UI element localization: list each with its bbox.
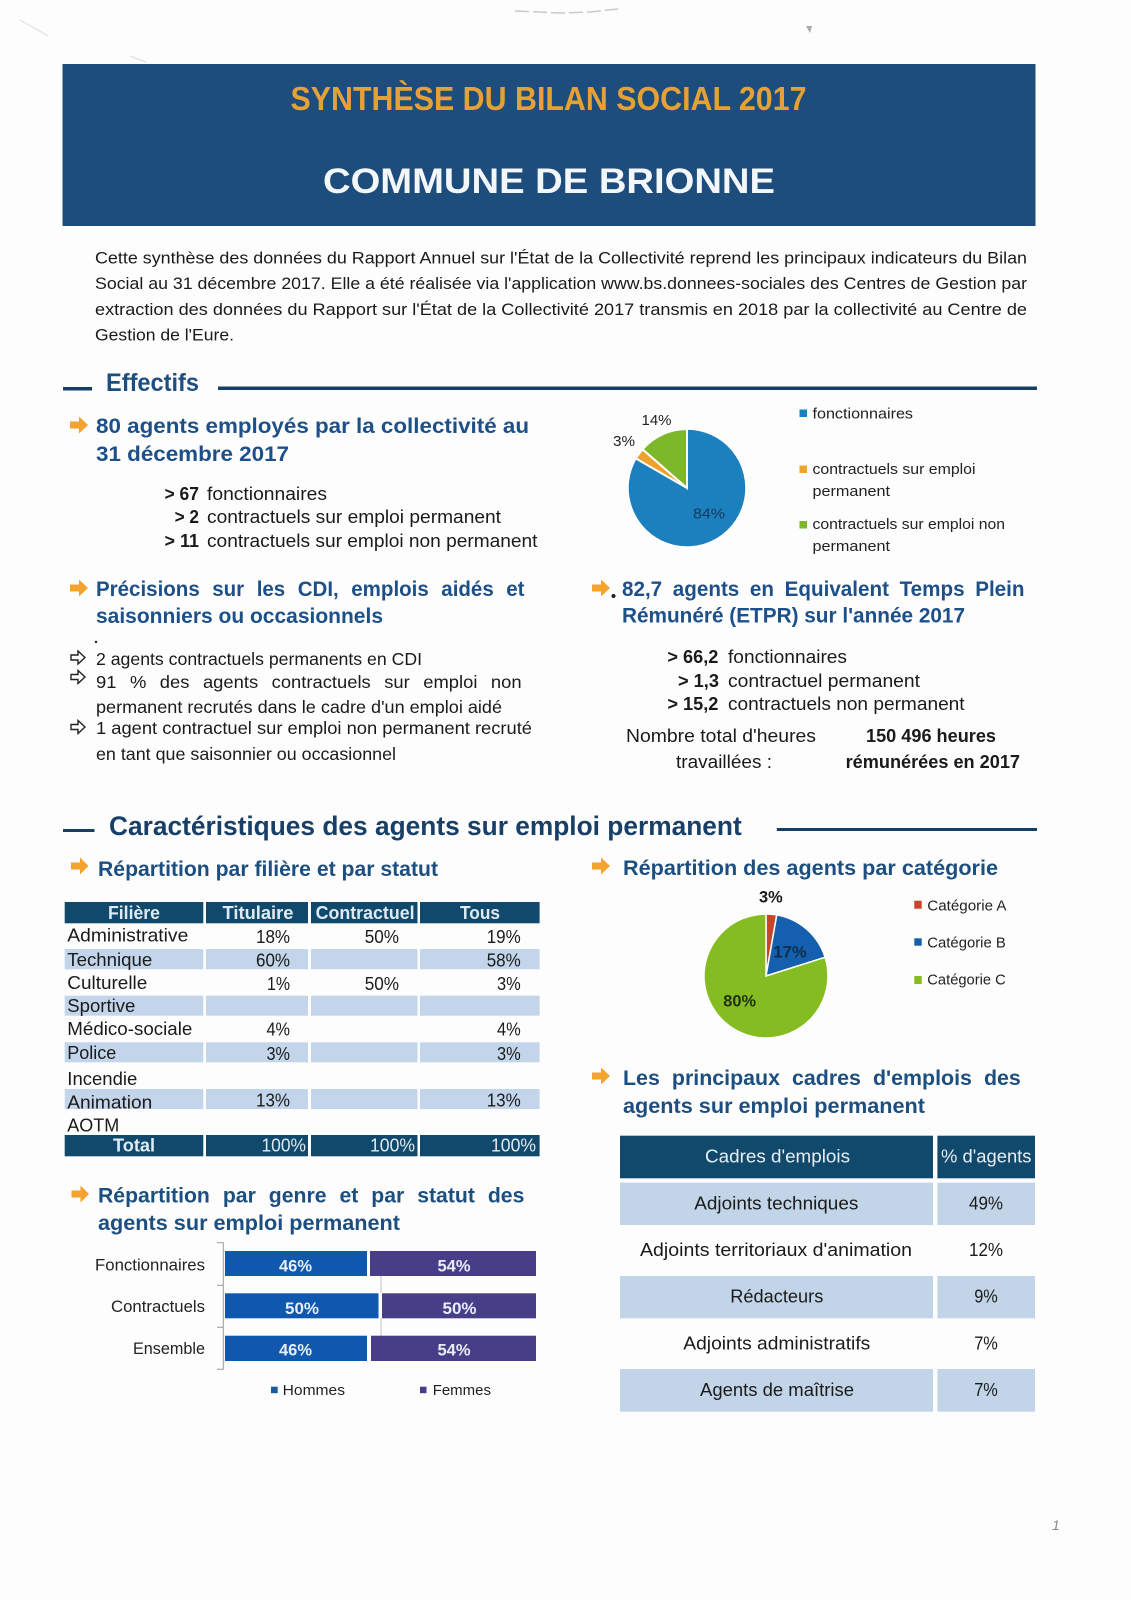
heading: 80 agents (96, 415, 529, 466)
icon: orange arrow (592, 1068, 610, 1084)
heading: cadres d'emplois: Les principaux cadres d'emplois des (623, 1067, 1021, 1090)
table: filières: 13% (256, 1091, 290, 1111)
legend: statuts: fonctionnaires (812, 406, 913, 423)
bar chart: genre: Contractuels (111, 1298, 205, 1316)
list: ETPR: > 15,2 (667, 694, 718, 714)
list: ETPR: fonctionnaires (728, 647, 847, 667)
pie chart: statuts: 14% (642, 412, 672, 429)
heading: 80 agents: 80 agents employés par la collectivité au (96, 415, 529, 438)
heading: précisions: Précisions sur les CDI, emplois aidés et (96, 578, 525, 601)
pie chart: statuts: 84% (693, 506, 725, 523)
list: ETPR: contractuels non permanent (728, 694, 965, 714)
table: filières: 4% (497, 1020, 521, 1040)
table: filières: Police (67, 1043, 116, 1063)
list: agents by status: > 11 (164, 531, 199, 551)
table: filières: 3% (497, 974, 521, 994)
list: précisions: en tant que saisonnier ou occasionnel (96, 744, 396, 764)
page number: 1 (1052, 1517, 1060, 1533)
section heading: effectifs (63, 369, 1037, 397)
intro text block: Cette synthèse des données du Rapport Annuel sur l'État de la Collectivité reprend les principaux indicateurs du Bilan (95, 248, 1027, 267)
intro text block: Gestion de l'Eure. (95, 326, 234, 345)
legend: statuts (800, 406, 1005, 555)
list: agents by status (164, 484, 538, 551)
list: précisions: permanent recrutés dans le cadre d'un emploi aidé (96, 697, 502, 717)
table: filières: 1% (267, 974, 290, 994)
table: filières: 50% (365, 974, 399, 994)
list: agents by status: > 2 (175, 507, 199, 527)
heading: ETPR: Rémunéré (ETPR) sur l'année 2017 (622, 604, 965, 628)
table: filières: Médico-sociale (67, 1019, 192, 1039)
table: filières: Culturelle (67, 973, 147, 993)
table: filières: 3% (497, 1044, 521, 1064)
bar chart: genre (95, 1243, 536, 1369)
table: filières: Sportive (67, 996, 135, 1016)
table: filières: Total (113, 1136, 155, 1156)
heading: 80 agents: 31 décembre 2017 (96, 443, 289, 466)
section heading: effectifs: Effectifs (106, 369, 199, 397)
legend: catégories: Catégorie C (927, 971, 1006, 988)
table: filières: 13% (487, 1091, 521, 1111)
table: filières: Filière (108, 903, 160, 923)
pie chart: catégories (704, 888, 828, 1038)
heading: cadres d'emplois: agents sur emploi permanent (623, 1095, 925, 1118)
text: heures travaillées (626, 726, 1020, 772)
icon: orange arrow (592, 580, 610, 596)
table: cadres d'emplois: 7% (974, 1380, 998, 1400)
table: filières: 60% (256, 951, 290, 971)
list: précisions: 91 % des agents contractuels sur emploi non (96, 672, 522, 692)
text: heures travaillées: rémunérées en 2017 (846, 752, 1020, 772)
text: heures travaillées: 150 496 heures (866, 726, 996, 746)
pie chart: catégories: 17% (773, 943, 807, 962)
panel: ETPR (592, 578, 1024, 772)
pie chart: catégories: 80% (723, 992, 756, 1011)
text: heures travaillées: travaillées : (676, 752, 772, 772)
section heading: caractéristiques (63, 811, 1037, 841)
legend: genre: Hommes (283, 1382, 345, 1399)
icon: orange arrow (72, 1186, 89, 1202)
table: cadres d'emplois: Adjoints territoriaux d'animation (640, 1240, 912, 1260)
legend: catégories: Catégorie B (927, 935, 1006, 952)
table: cadres d'emplois (620, 1136, 1035, 1412)
heading: ETPR: 82,7 agents en Equivalent Temps Plein (622, 578, 1024, 601)
list: agents by status: contractuels sur emploi permanent (207, 507, 501, 527)
legend: statuts: permanent (812, 538, 891, 555)
legend: catégories (914, 898, 1006, 988)
heading: précisions (96, 578, 525, 628)
list: précisions: 2 agents contractuels permanents en CDI (96, 649, 422, 669)
panel: cadres d'emplois (592, 1067, 1035, 1412)
bar chart: genre: Ensemble (133, 1340, 205, 1358)
table: filières: Tous (460, 903, 500, 923)
table: filières: Incendie (67, 1069, 137, 1089)
pie chart: statuts (613, 412, 746, 547)
table: cadres d'emplois: % d'agents (941, 1147, 1032, 1167)
bar chart: genre: 46% (279, 1257, 312, 1276)
intro text block (95, 248, 1027, 345)
bar chart: genre: Fonctionnaires (95, 1257, 205, 1275)
table: cadres d'emplois: Adjoints administratifs (683, 1333, 870, 1353)
icon: orange arrow (70, 416, 88, 434)
panel: répartition par genre (72, 1185, 536, 1399)
table: cadres d'emplois: 12% (969, 1240, 1003, 1260)
table: filières: 100% (491, 1136, 536, 1156)
table: filières: 18% (256, 927, 290, 947)
panel: répartition par catégorie (592, 857, 1006, 1038)
list: agents by status: fonctionnaires (207, 484, 327, 504)
bar chart: genre: 54% (438, 1257, 470, 1276)
table: filières: Animation (67, 1092, 152, 1112)
heading: genre: Répartition par genre et par statut des (98, 1185, 524, 1208)
legend: genre: Femmes (433, 1382, 491, 1399)
pie chart: catégories: 3% (759, 888, 783, 907)
table: cadres d'emplois: 9% (974, 1287, 998, 1307)
section heading: caractéristiques: Caractéristiques des agents sur emploi permanent (109, 811, 742, 841)
table: cadres d'emplois: 49% (969, 1193, 1003, 1213)
intro text block: Social au 31 décembre 2017. Elle a été réalisée via l'application www.bs.donnees-sociales des Centres de Gestion par (95, 274, 1027, 293)
table: filières (65, 902, 540, 1156)
bar chart: genre: 46% (279, 1340, 312, 1360)
icon: orange arrow (71, 858, 88, 874)
icon: orange arrow (70, 580, 88, 596)
legend: catégories: Catégorie A (927, 898, 1006, 915)
title: synthèse: SYNTHÈSE DU BILAN SOCIAL 2017 (290, 80, 806, 117)
list: précisions: 1 agent contractuel sur emploi non permanent recruté (96, 718, 532, 738)
list: ETPR: > 66,2 (667, 647, 718, 667)
heading: filière: Répartition par filière et par statut (98, 858, 438, 881)
table: filières: 4% (266, 1020, 290, 1040)
table: filières: Contractuel (316, 903, 415, 923)
table: filières: AOTM (67, 1116, 119, 1136)
table: cadres d'emplois: Cadres d'emplois (705, 1147, 850, 1167)
list: ETPR: contractuel permanent (728, 671, 920, 691)
list: précisions (71, 641, 532, 764)
table: filières: 19% (487, 927, 521, 947)
table: filières: Technique (67, 950, 152, 970)
table: cadres d'emplois: Rédacteurs (730, 1287, 823, 1307)
table: filières: 58% (487, 951, 521, 971)
panel: 80 agents (70, 415, 538, 551)
heading: précisions: saisonniers ou occasionnels (96, 605, 383, 628)
table: filières: Titulaire (222, 903, 294, 923)
heading: cadres d'emplois (623, 1067, 1021, 1118)
heading: catégorie: Répartition des agents par catégorie (623, 857, 998, 880)
table: cadres d'emplois: Adjoints techniques (694, 1193, 858, 1213)
list: ETPR (667, 647, 965, 714)
legend: statuts: permanent (812, 483, 891, 500)
text: heures travaillées: Nombre total d'heures (626, 726, 816, 746)
pie chart: statuts: 3% (613, 433, 635, 450)
heading: genre: agents sur emploi permanent (98, 1212, 400, 1235)
list: agents by status: > 67 (164, 484, 199, 504)
panel: répartition par filière (65, 858, 540, 1156)
title banner (62, 64, 1036, 226)
bar chart: genre: 50% (442, 1299, 476, 1318)
intro text block: extraction des données du Rapport sur l'État de la Collectivité 2017 transmis en 2018 par la collectivité au Centre de (95, 300, 1027, 319)
table: filières: 100% (262, 1136, 306, 1156)
legend: statuts: contractuels sur emploi non (812, 516, 1005, 533)
table: filières: 50% (365, 927, 399, 947)
icon: orange arrow (592, 858, 610, 874)
title: commune: COMMUNE DE BRIONNE (323, 162, 775, 201)
bar chart: genre: 50% (285, 1299, 319, 1318)
table: cadres d'emplois: Agents de maîtrise (700, 1380, 854, 1400)
table: filières: 100% (370, 1136, 415, 1156)
table: filières: Administrative (67, 926, 188, 946)
table: cadres d'emplois: 7% (974, 1333, 998, 1353)
heading: genre (98, 1185, 524, 1235)
bar chart: genre: 54% (438, 1340, 470, 1360)
heading: ETPR (622, 578, 1024, 628)
panel: précisions CDI (70, 578, 532, 764)
table: filières: 3% (266, 1044, 290, 1064)
legend: statuts: contractuels sur emploi (812, 461, 976, 478)
list: ETPR: > 1,3 (678, 671, 719, 691)
legend: genre (271, 1382, 491, 1399)
list: agents by status: contractuels sur emploi non permanent (207, 531, 538, 551)
